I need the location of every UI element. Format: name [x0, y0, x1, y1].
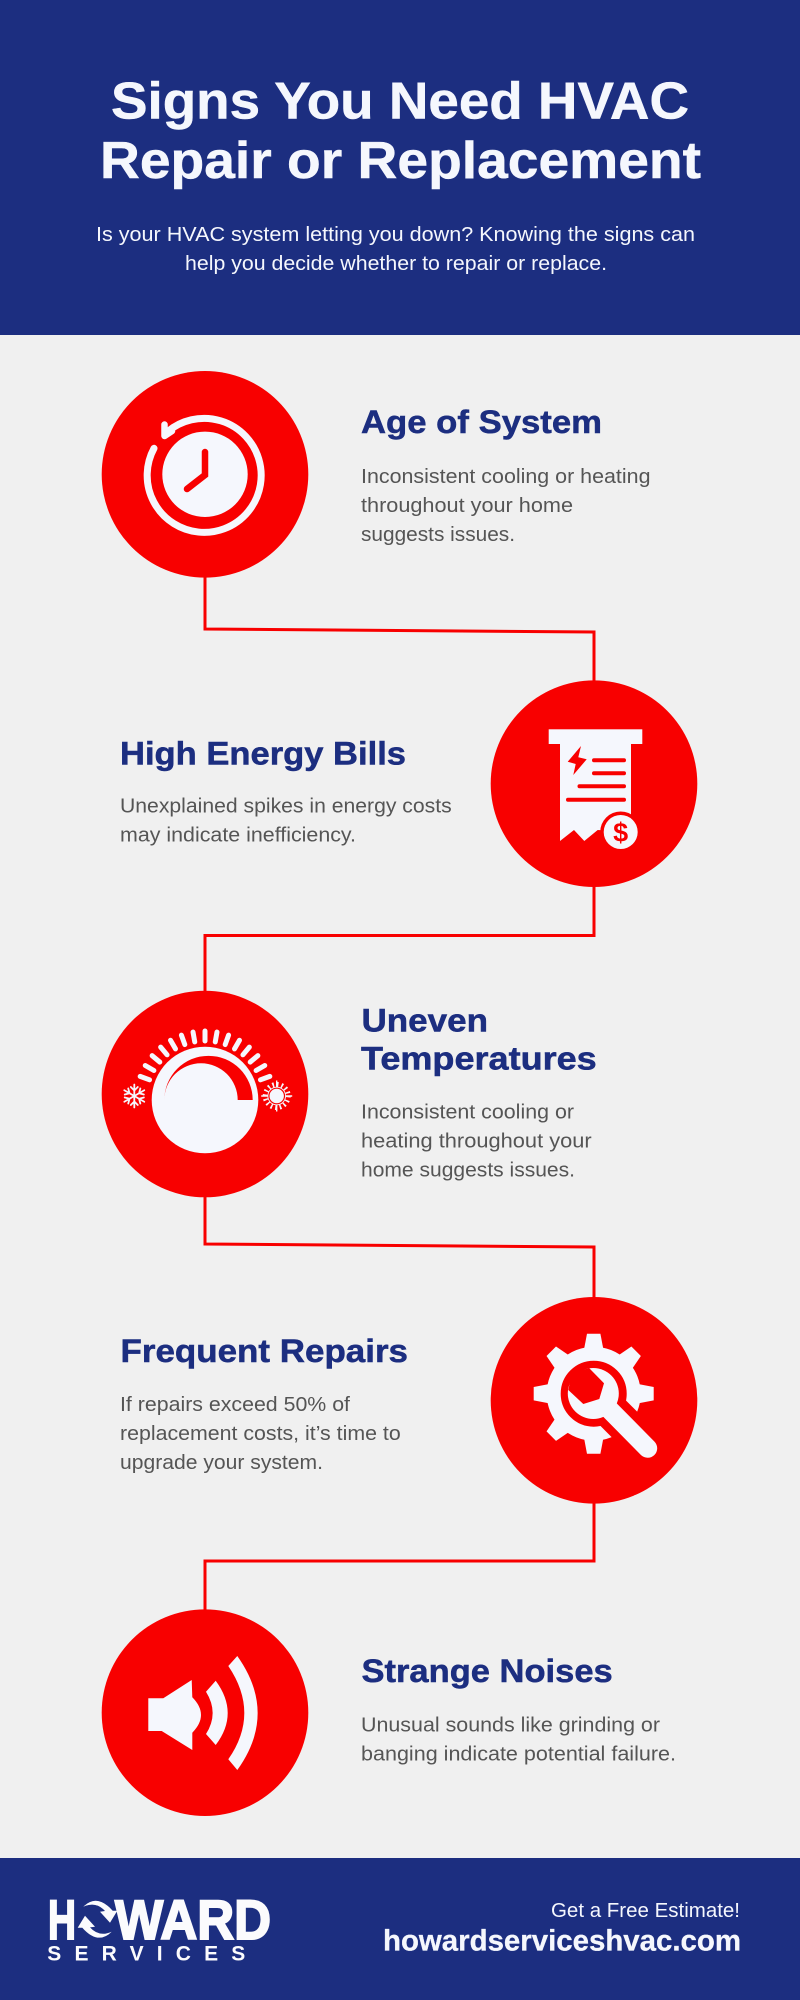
header panel — [0, 0, 800, 335]
logo swirl arrows — [78, 1901, 117, 1938]
section: age of system: Age of System — [361, 404, 602, 440]
logo: Howard Services: SERVICES — [47, 1943, 245, 1966]
intro text: help you decide whether to repair or replace. — [185, 252, 607, 275]
section: strange noises — [361, 1653, 676, 1766]
call to action: howardserviceshvac.com — [383, 1924, 741, 1958]
title — [100, 72, 701, 190]
section: uneven temperatures: heating throughout your — [361, 1130, 592, 1152]
dial ticks — [140, 1031, 270, 1080]
section: strange noises: banging indicate potential failure. — [361, 1744, 676, 1766]
section: strange noises: Unusual sounds like grinding or — [361, 1715, 660, 1737]
title: Repair or Replacement — [100, 132, 701, 190]
icon: snowflake — [123, 1084, 146, 1108]
connector: repairs to noises — [205, 1495, 594, 1620]
section: age of system: Inconsistent cooling or heating — [361, 466, 650, 488]
gear — [534, 1334, 654, 1454]
section: high energy bills — [120, 735, 452, 847]
section: uneven temperatures: Inconsistent cooling or — [361, 1101, 574, 1123]
section: high energy bills: Unexplained spikes in energy costs — [120, 796, 452, 818]
section: frequent repairs: upgrade your system. — [120, 1452, 323, 1474]
title: Signs You Need HVAC — [111, 72, 689, 130]
section: uneven temperatures: Uneven — [362, 1003, 488, 1039]
connector: energy bills to temperatures — [205, 880, 594, 1000]
icon: clock with circular arrow — [102, 371, 308, 578]
section: age of system: throughout your home — [361, 495, 573, 517]
section: age of system: suggests issues. — [361, 524, 515, 546]
footer panel — [0, 1858, 800, 2000]
section: frequent repairs: If repairs exceed 50% of — [120, 1394, 350, 1416]
section: uneven temperatures: Temperatures — [361, 1040, 597, 1076]
logo: Howard Services — [47, 1888, 271, 1966]
icon: speaker with sound waves — [102, 1609, 308, 1816]
logo: Howard Services: WARD — [115, 1888, 271, 1951]
section: frequent repairs: Frequent Repairs — [120, 1333, 408, 1369]
section: high energy bills: may indicate inefficiency. — [120, 825, 356, 847]
section: uneven temperatures — [361, 1003, 597, 1182]
icon: energy bill receipt: $ — [613, 818, 628, 848]
icon: energy bill receipt — [491, 680, 697, 887]
logo: Howard Services: H — [48, 1888, 76, 1951]
icon: sun — [261, 1080, 292, 1112]
connector: temperatures to repairs — [205, 1190, 594, 1310]
intro text: Is your HVAC system letting you down? Knowing the signs can — [96, 223, 695, 246]
wrench — [568, 1368, 648, 1448]
section: uneven temperatures: home suggests issues. — [361, 1160, 575, 1182]
section: frequent repairs: replacement costs, it’s time to — [120, 1423, 401, 1445]
section: frequent repairs — [120, 1333, 408, 1474]
section: strange noises: Strange Noises — [362, 1653, 613, 1689]
section: age of system — [361, 404, 650, 546]
section: high energy bills: High Energy Bills — [120, 735, 406, 771]
connector: age to energy bills — [205, 570, 594, 690]
icon: thermostat dial — [102, 991, 308, 1197]
call to action: Get a Free Estimate! — [551, 1900, 740, 1922]
icon: gear and wrench — [491, 1297, 697, 1504]
call to action — [383, 1900, 741, 1958]
intro text — [96, 223, 695, 275]
